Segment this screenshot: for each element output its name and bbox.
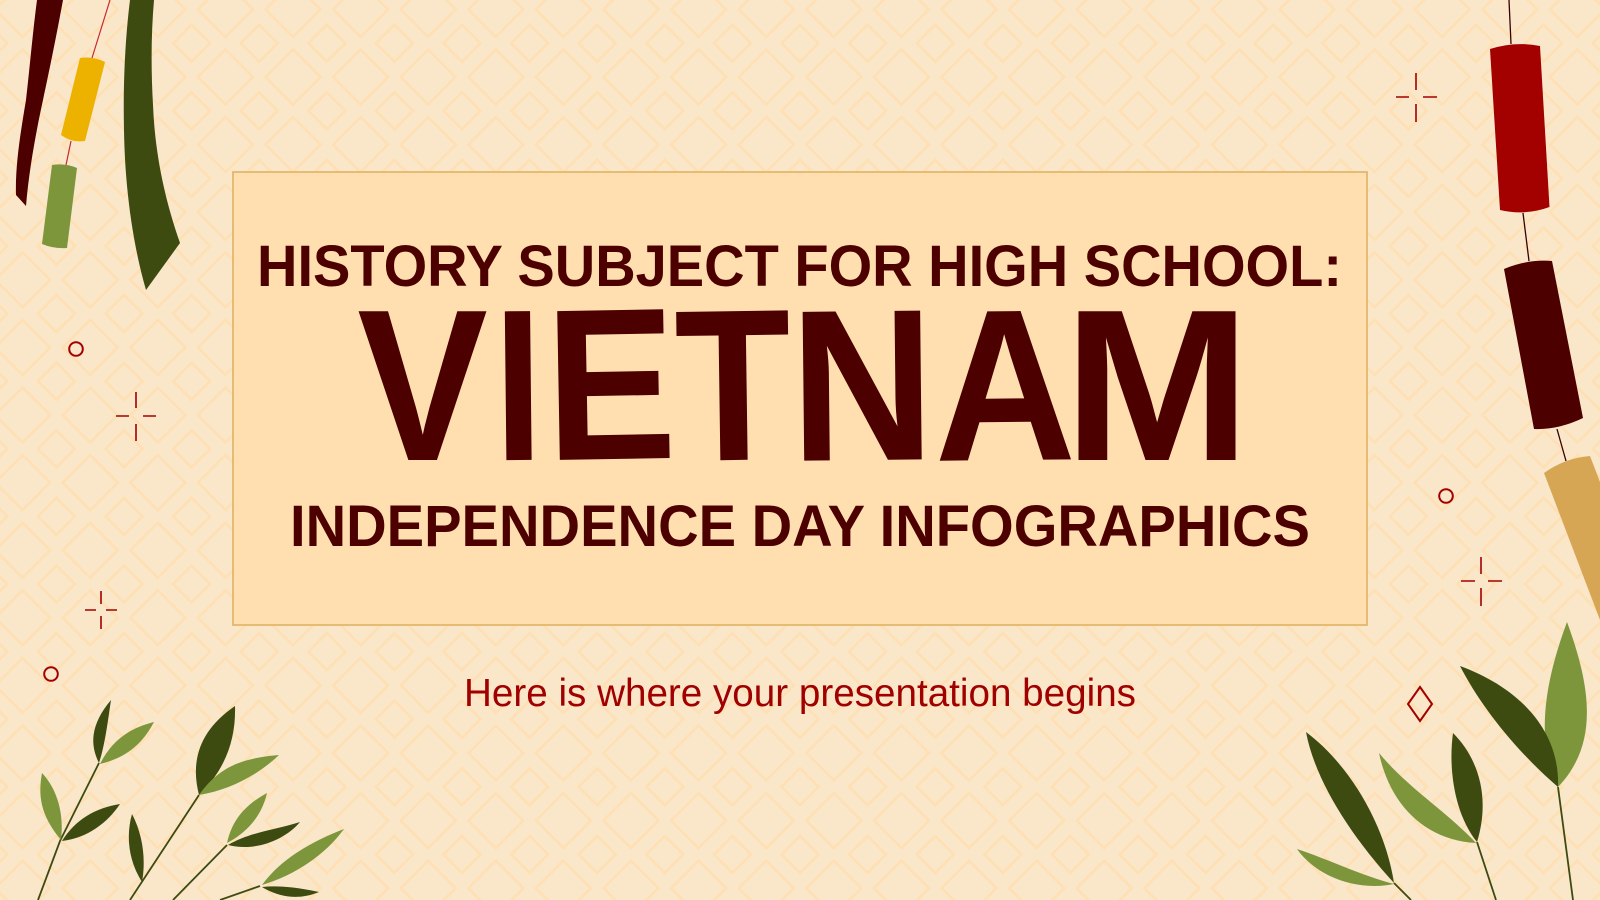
panel: title box (233, 172, 1367, 625)
lantern string: top right (1490, 0, 1600, 620)
heading: VIETNAM: I (493, 264, 544, 506)
heading line: independence day: INDEPENDENCE DAY INFOGRAPHICS (290, 494, 1310, 559)
ribbon: dark red top left (16, 0, 63, 206)
heading line: history subject: HISTORY SUBJECT FOR HIGH SCHOOL: (257, 234, 1342, 299)
plant: bottom left leaves (38, 700, 344, 900)
subtitle: Here is where your presentation begins (464, 672, 1136, 715)
lantern: tan (1544, 456, 1600, 620)
decoration: sparkle top right (1396, 73, 1437, 122)
lantern string: top left (42, 0, 110, 248)
decoration: circle lower left (44, 667, 58, 681)
lantern: gold (61, 58, 105, 141)
lantern: red (1490, 44, 1550, 212)
decoration: diamond right (1408, 687, 1432, 721)
lantern: dark maroon (1504, 261, 1583, 429)
heading: VIETNAM: N (789, 265, 936, 507)
heading: VIETNAM: V (357, 264, 488, 506)
decoration: sparkle right (1461, 557, 1502, 606)
ribbon: dark green top left (124, 0, 180, 290)
lantern: light green (42, 164, 77, 248)
decoration: circle left (69, 342, 83, 356)
title (257, 234, 1342, 559)
decoration: circle right (1439, 489, 1453, 503)
heading: VIETNAM: T (673, 265, 793, 508)
decoration: sparkle left (116, 392, 156, 441)
heading: VIETNAM (357, 262, 1251, 508)
plant: bottom right leaves (1297, 622, 1587, 900)
heading: VIETNAM: M (1063, 264, 1251, 506)
heading: VIETNAM: A (933, 263, 1077, 507)
decoration: sparkle lower left (85, 591, 117, 629)
heading: VIETNAM: E (543, 262, 678, 506)
